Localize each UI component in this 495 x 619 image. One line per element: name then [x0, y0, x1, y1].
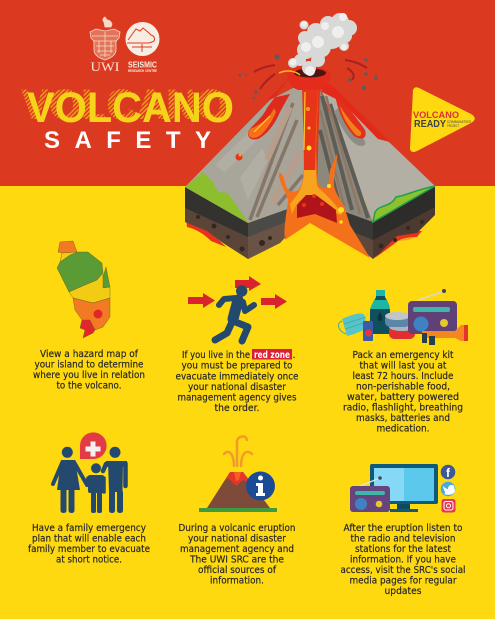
text: after the eruption: information. If you have: [350, 554, 456, 566]
green patches: [185, 172, 248, 223]
lava edge under blocks: [186, 219, 226, 247]
illustration: volcano cross-section: [185, 13, 435, 259]
logo: UWI crest: [90, 17, 120, 74]
text: red zone: If you live in the: [182, 350, 250, 361]
text: after the eruption: updates: [384, 586, 422, 597]
water bottle: [370, 290, 390, 334]
icon: facebook: f: [446, 466, 451, 480]
text: emergency kit: that will last you at: [360, 360, 447, 372]
text: emergency kit: [343, 350, 463, 434]
text: emergency kit: least 72 hours. Include: [352, 371, 454, 382]
text: after the eruption: media pages for regular: [350, 576, 457, 586]
highlight: red zone: [252, 349, 292, 360]
text: official sources: information.: [210, 576, 264, 586]
lava spatter arcs: [254, 60, 367, 89]
text: hazard map: [33, 349, 145, 392]
logo: Seismic Research Centre: RESEARCH CENTRE: [128, 69, 157, 73]
first-aid bubble: [80, 432, 107, 459]
mountain right inner face: [317, 90, 373, 222]
badge: Volcano Ready: COMMUNITIES: [447, 120, 471, 124]
tin cans: [389, 325, 415, 339]
central lava stream: [279, 90, 370, 258]
title: Volcano: VOLCANO: [27, 84, 234, 132]
text: emergency kit: non-perishable food,: [356, 382, 450, 392]
text: official sources: The UWI SRC are the: [189, 554, 284, 566]
text: after the eruption: stations for the latest: [355, 544, 451, 555]
text: red zone: the order.: [214, 403, 260, 414]
mountain left inner face: [248, 88, 305, 223]
icon: family: [53, 432, 127, 513]
text: after the eruption: the radio and television: [350, 534, 456, 544]
text: after the eruption: After the eruption listen to: [344, 523, 463, 534]
right rock block: [373, 186, 435, 259]
text: after the eruption: access, visit the SRC's social: [340, 565, 466, 576]
badge: Volcano Ready: READY: [414, 119, 446, 130]
logo: Seismic Research Centre: SEISMIC: [128, 60, 157, 70]
icon: running figure with arrows: [188, 276, 287, 341]
text: hazard map: to the volcano.: [56, 380, 122, 392]
medicine bottle: [363, 321, 373, 341]
mountain left outer face: [185, 88, 293, 223]
icon: volcano and info: [199, 436, 277, 512]
left rock block: [185, 187, 248, 259]
text: family plan: [28, 523, 150, 566]
text: official sources: [178, 523, 296, 586]
text: family plan: at short notice.: [56, 554, 122, 566]
badge: Volcano Ready: PROJECT: [447, 124, 459, 128]
mountain right outer face: [318, 82, 435, 222]
logo: Seismic Research Centre: [126, 22, 160, 73]
text: emergency kit: medication.: [376, 424, 430, 434]
text: family plan: plan that will enable each: [32, 534, 146, 544]
icon: television radio and social media: [350, 464, 456, 512]
text: emergency kit: masks, batteries and: [356, 413, 450, 424]
mask: [342, 313, 368, 336]
text: red zone: red zone: [254, 350, 290, 361]
text: official sources: your national disaster: [188, 534, 286, 544]
text: family plan: Have a family emergency: [32, 523, 146, 534]
badge: Volcano Ready: VOLCANO: [413, 110, 459, 121]
text: red zone: your national disaster: [188, 382, 286, 393]
background: yellow body: [0, 186, 495, 619]
text: hazard map: View a hazard map of: [40, 349, 139, 360]
title: Safety: SAFETY: [44, 127, 211, 154]
crater: [287, 66, 331, 90]
text: official sources: During a volcanic eruption: [178, 523, 296, 534]
text: family plan: family member to evacuate: [28, 544, 150, 555]
icon: hazard map: [57, 241, 110, 338]
text: official sources: management agency and: [180, 544, 294, 555]
text: emergency kit: Pack an emergency kit: [352, 350, 454, 361]
title: Volcano: VOLCANO: [21, 81, 228, 129]
text: emergency kit: water, battery powered: [347, 392, 459, 403]
text: hazard map: where you live in relation: [33, 370, 145, 381]
flashlight: [422, 325, 468, 341]
text: red zone: evacuate immediately once: [176, 372, 299, 382]
lava side flows: [248, 74, 292, 139]
icon: emergency kit: [339, 289, 468, 345]
badge: Volcano Ready: [410, 87, 475, 152]
text: red zone: .: [292, 350, 296, 361]
text: red zone: [176, 349, 299, 414]
logo: UWI crest: UWI: [90, 59, 120, 74]
text: red zone: you must be prepared to: [182, 360, 293, 372]
text: emergency kit: radio, flashlight, breathing: [343, 402, 463, 414]
background: red header: [0, 0, 495, 186]
radio: [418, 291, 444, 300]
text: red zone: management agency gives: [178, 392, 296, 404]
text: hazard map: your island to determine: [34, 360, 144, 370]
text: after the eruption: [340, 523, 466, 597]
notch: [250, 224, 368, 259]
smoke plume: [288, 13, 357, 75]
batteries: [422, 333, 427, 343]
flying rocks: [238, 54, 378, 99]
icon: twitter: [441, 482, 455, 496]
text: official sources: official sources of: [198, 565, 277, 576]
icon: instagram: [442, 499, 456, 512]
